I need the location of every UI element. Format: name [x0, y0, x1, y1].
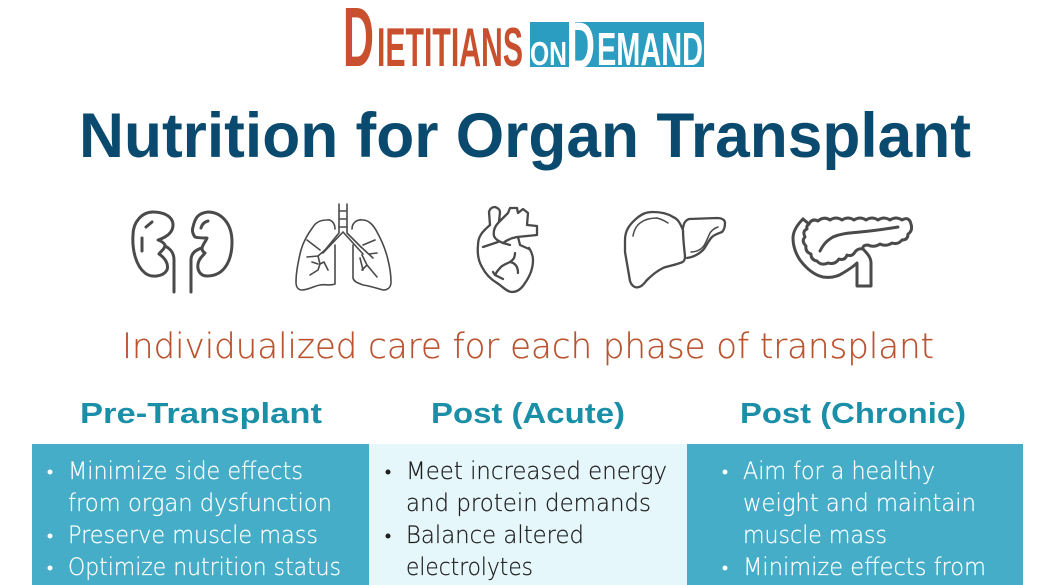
subtitle: Individualized care for each phase of transplant — [122, 327, 934, 367]
panel: pre-transplant — [32, 444, 369, 585]
logo — [343, 0, 704, 84]
panel: post acute — [369, 444, 687, 585]
heading: post chronic: Post (Chronic) — [740, 398, 966, 430]
panel: post acute: Balance altered — [406, 521, 584, 549]
logo: D — [567, 8, 595, 82]
panel: post acute: electrolytes — [406, 553, 533, 581]
logo: IETITIANS — [377, 16, 523, 78]
panel: post acute: Meet increased energy — [406, 457, 667, 485]
panel: post chronic: muscle mass — [743, 521, 887, 549]
panel: pre-transplant: Preserve muscle mass — [68, 521, 318, 549]
panel: pre-transplant: from organ dysfunction — [68, 489, 332, 517]
icon: kidneys — [133, 212, 232, 292]
title: Nutrition for Organ Transplant — [79, 101, 971, 171]
panel: post acute: and protein demands — [406, 489, 651, 517]
panel: pre-transplant: Optimize nutrition status — [68, 553, 341, 581]
panel: post chronic: Aim for a healthy — [743, 457, 935, 485]
icon: pancreas — [793, 218, 912, 286]
heading: post acute: Post (Acute) — [431, 398, 625, 430]
icon: liver — [625, 212, 725, 287]
logo: EMAND — [597, 23, 703, 75]
panel: post chronic — [687, 444, 1023, 585]
icon: lungs — [296, 204, 391, 290]
panel: post chronic: Minimize effects from — [743, 553, 986, 581]
panel: post chronic: weight and maintain — [743, 489, 976, 517]
icon: heart — [478, 207, 537, 292]
heading: pre-transplant: Pre-Transplant — [80, 398, 322, 430]
panel: pre-transplant: Minimize side effects — [68, 457, 303, 485]
logo: ON — [530, 35, 567, 72]
